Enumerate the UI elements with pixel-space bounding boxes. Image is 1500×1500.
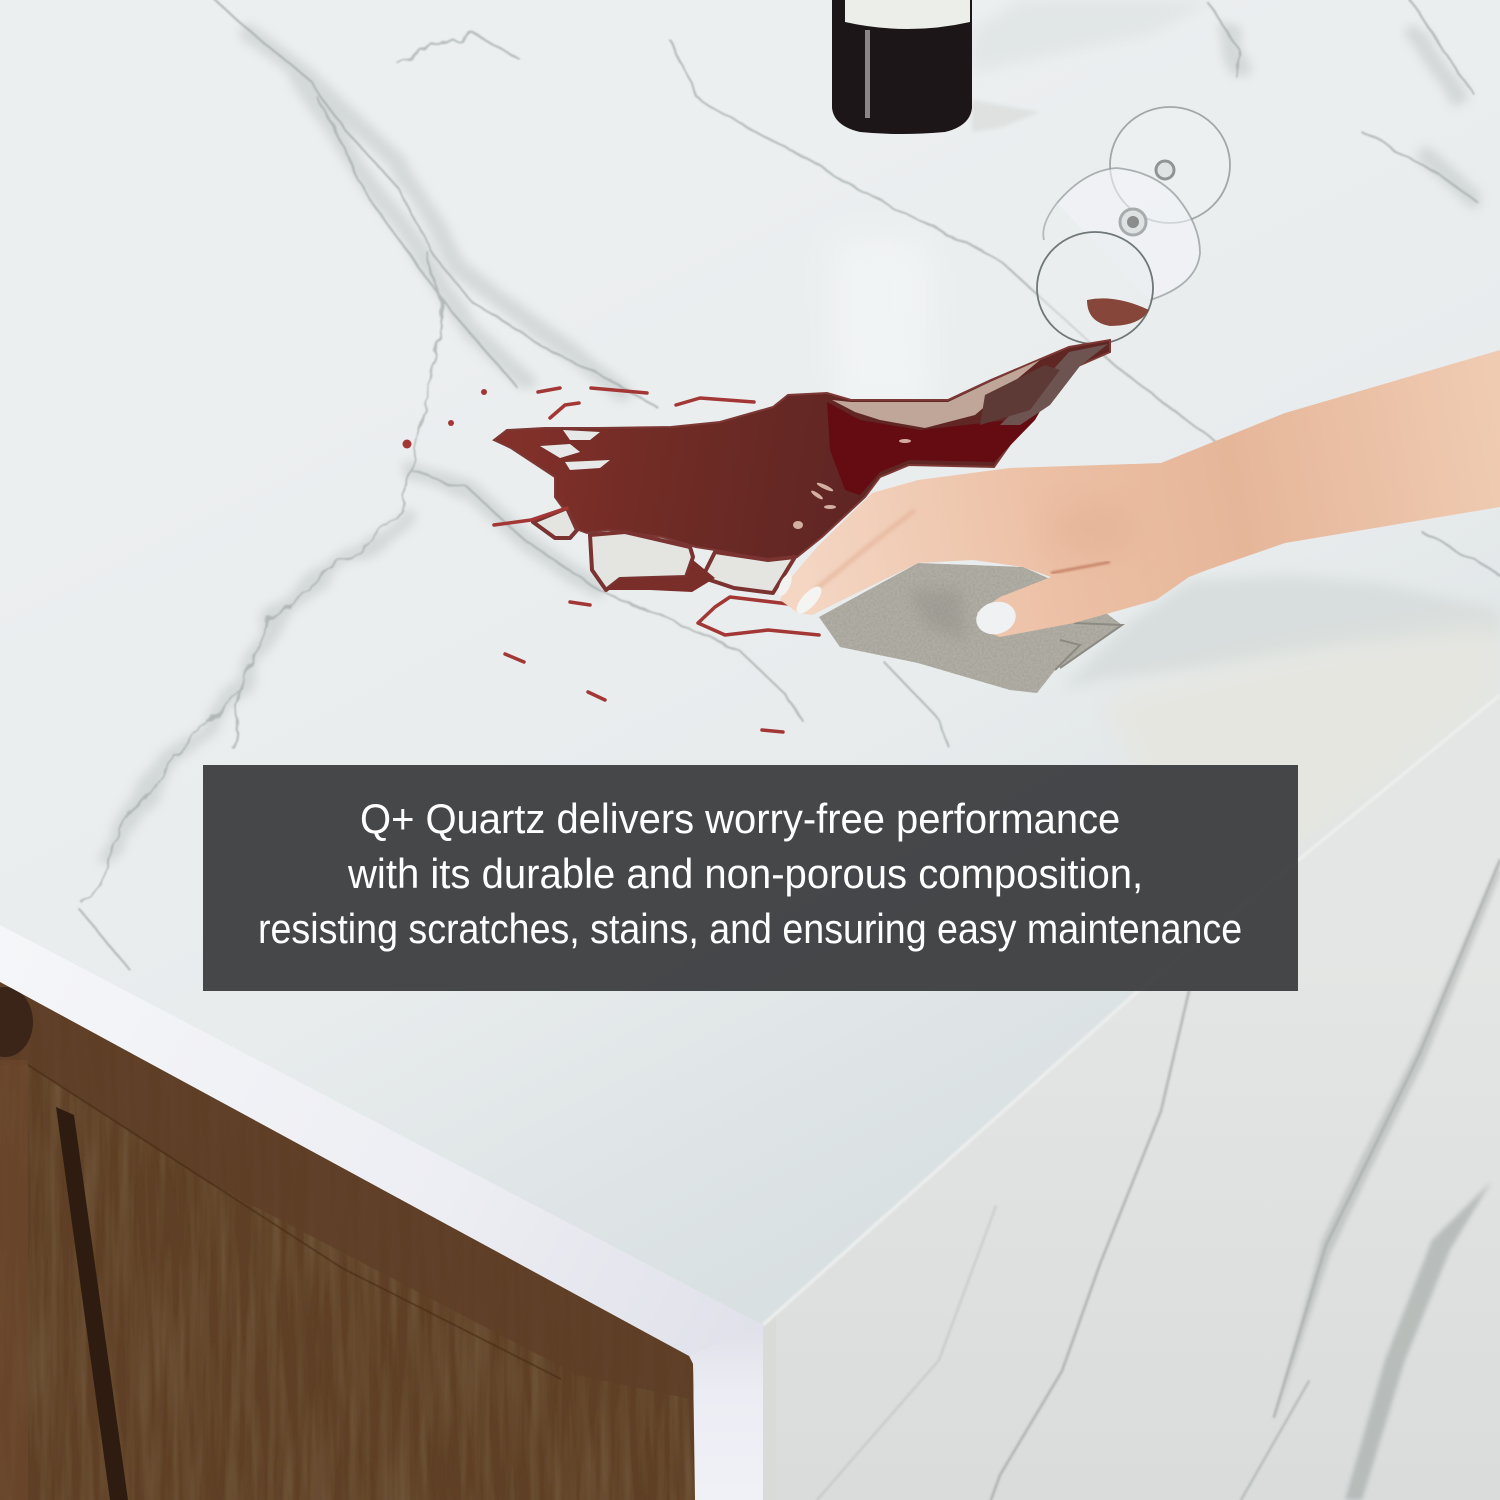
text panel	[203, 765, 1298, 991]
line 3: resisting scratches, stains, and ensuring easy maintenance	[258, 905, 1242, 952]
marble veins on the top surface	[80, 0, 1500, 970]
waterfall side of the countertop	[763, 695, 1500, 1500]
wine glass	[1037, 107, 1230, 344]
wine spill	[402, 340, 1110, 732]
front edge of the countertop	[0, 925, 763, 1500]
grey cloth	[819, 563, 1122, 693]
line 2: with its durable and non-porous composition,	[348, 850, 1143, 897]
line 1: Q+ Quartz delivers worry-free performance	[360, 795, 1120, 842]
wine bottle	[832, 0, 972, 134]
wood cabinet	[0, 980, 700, 1500]
hand and arm	[775, 350, 1500, 639]
